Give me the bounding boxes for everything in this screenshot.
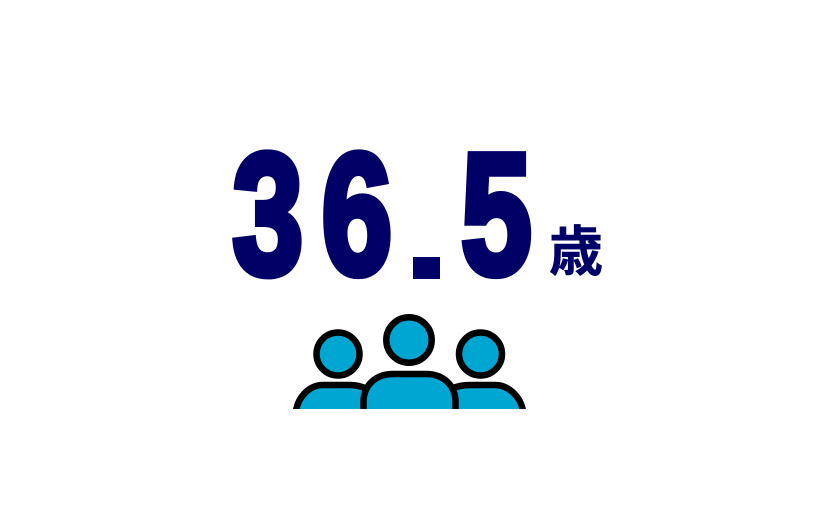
- unit: years old: 歳: [549, 222, 603, 282]
- right person head: [459, 332, 502, 376]
- baseline cover: [285, 409, 535, 421]
- decimal point: [413, 257, 440, 279]
- digit 3: 3: [232, 119, 303, 311]
- icon: group of three people: [285, 317, 535, 421]
- left person head: [316, 332, 360, 376]
- center person body: [364, 374, 456, 416]
- digit 5: 5: [461, 119, 532, 311]
- center person head: [386, 317, 432, 363]
- average age figure: [232, 119, 603, 311]
- left person body: [296, 385, 368, 416]
- digit 6: 6: [322, 119, 392, 311]
- right person body: [450, 385, 524, 416]
